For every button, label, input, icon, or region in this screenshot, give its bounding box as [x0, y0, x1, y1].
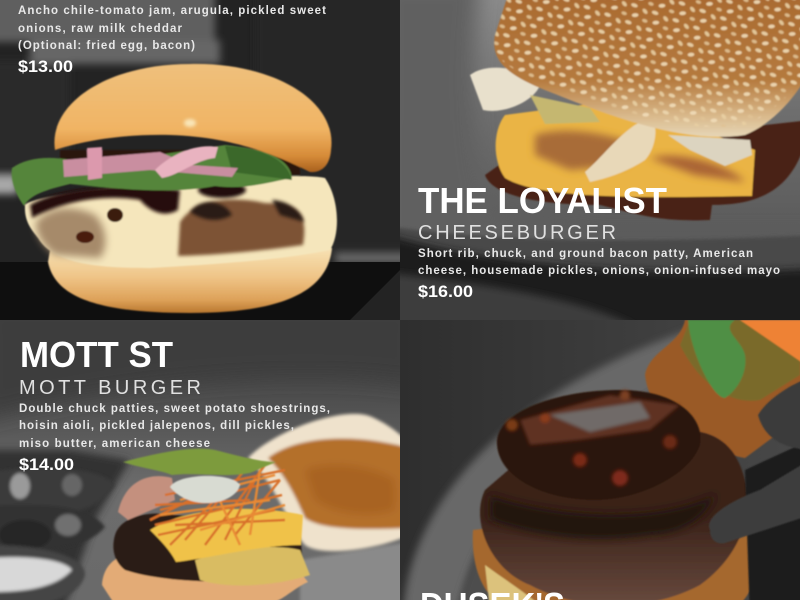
photo: cheese burger with chile jam	[12, 64, 337, 313]
photo: black gloved hand	[709, 378, 800, 600]
panel: mott st	[0, 320, 400, 600]
panel: top-left burger	[0, 0, 420, 320]
text: mott st heading and details: Double chuck patties, sweet potato shoestrings,	[19, 403, 330, 415]
text: mott st heading and details: hoisin aioli, pickled jalepenos, dill pickles,	[19, 420, 294, 432]
text: the loyalist heading and details: cheese, housemade pickles, onions, onion-infused mayo	[418, 265, 780, 277]
photo: open bun behind burger	[248, 414, 410, 551]
text: ingredients and price: onions, raw milk cheddar	[18, 23, 183, 35]
panel: the loyalist	[400, 0, 800, 320]
photo: background burger	[645, 320, 800, 458]
text: the loyalist heading and details: Short rib, chuck, and ground bacon patty, American	[418, 248, 753, 260]
photo: stacked mott burger	[102, 449, 310, 600]
text: the loyalist heading and details	[418, 180, 780, 301]
text: mott st heading and details	[19, 334, 330, 474]
text: ingredients and price: (Optional: fried egg, bacon)	[18, 40, 195, 52]
photo: sesame cheeseburger	[470, 0, 800, 220]
text: ingredients and price: Ancho chile-tomato jam, arugula, pickled sweet	[18, 5, 326, 17]
photo: glazed patty on bun	[473, 390, 767, 600]
text: mott st heading and details: $14.00	[19, 455, 74, 474]
text: mott st heading and details: miso butter, american cheese	[19, 438, 210, 450]
photo: metal bowls	[0, 468, 115, 600]
text: mott st heading and details: MOTT BURGER	[19, 377, 201, 399]
text: ingredients and price	[18, 5, 326, 76]
text: the loyalist heading and details: THE LOYALIST	[418, 180, 667, 221]
panel: dusek's	[400, 320, 800, 600]
text: ingredients and price: $13.00	[18, 57, 73, 76]
text: the loyalist heading and details: CHEESEBURGER	[418, 222, 616, 244]
text: the loyalist heading and details: $16.00	[418, 282, 473, 301]
text: mott st heading and details: MOTT ST	[20, 334, 173, 375]
